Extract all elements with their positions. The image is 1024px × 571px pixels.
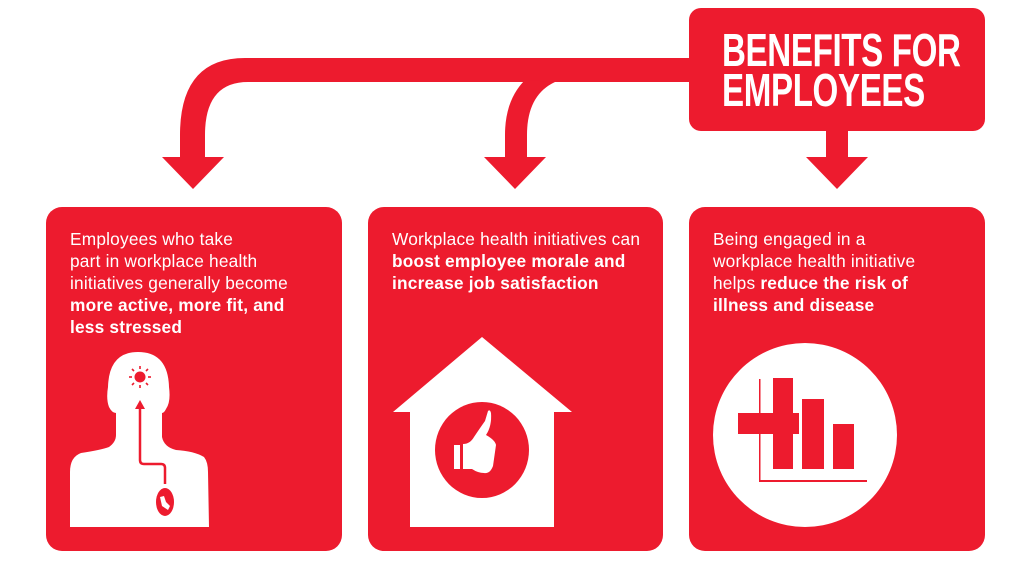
text block: less stressed xyxy=(70,317,182,337)
arrow: middle xyxy=(484,80,555,189)
icon: house with thumbs up xyxy=(393,337,572,527)
title box: EMPLOYEES xyxy=(722,64,925,116)
text block xyxy=(392,229,640,293)
icon: person with sun and shoe xyxy=(70,352,209,527)
panel: morale xyxy=(368,207,663,551)
text block: part in workplace health xyxy=(70,251,257,271)
panel: active and fit xyxy=(46,207,342,551)
text block: initiatives generally become xyxy=(70,273,288,293)
arrow: right xyxy=(806,128,868,189)
title box xyxy=(689,8,985,131)
text block: workplace health initiative xyxy=(713,251,915,271)
text block: Workplace health initiatives can xyxy=(392,229,640,249)
title box: BENEFITS FOR xyxy=(722,24,961,76)
text block: illness and disease xyxy=(713,295,874,315)
text block xyxy=(70,229,288,337)
text block: Being engaged in a xyxy=(713,229,866,249)
text block: increase job satisfaction xyxy=(392,273,599,293)
text block: boost employee morale and xyxy=(392,251,626,271)
text block: Employees who take xyxy=(70,229,233,249)
text block xyxy=(713,229,915,315)
icon: circle with cross and bar chart xyxy=(713,343,897,527)
panel: reduce risk xyxy=(689,207,985,551)
text block: helps reduce the risk of xyxy=(713,273,908,293)
text block: more active, more fit, and xyxy=(70,295,285,315)
arrow: left xyxy=(162,58,690,189)
